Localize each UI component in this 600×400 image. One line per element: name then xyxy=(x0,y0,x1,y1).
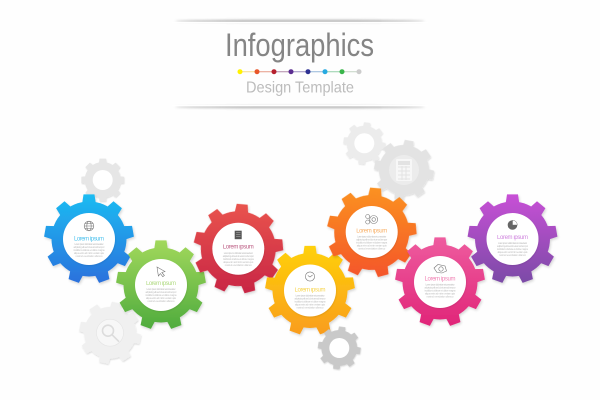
body text: adipiscing elit sed do eiusmod tempor xyxy=(146,291,177,294)
body text: incididunt ut labore et dolore magna xyxy=(356,242,388,244)
icon: clock xyxy=(305,272,315,281)
body text: adipiscing elit sed do eiusmod tempor xyxy=(356,238,387,242)
body text: Lorem ipsum dolor sit amet consectetur xyxy=(74,243,104,246)
body text: Lorem ipsum dolor sit amet consectetur xyxy=(295,294,325,298)
body text: aliqua enim ad minim veniam quis xyxy=(425,292,456,296)
body text: aliqua enim ad minim veniam quis xyxy=(146,297,177,300)
gear: purple xyxy=(468,194,557,283)
body text xyxy=(74,243,105,258)
small grey gear top left xyxy=(81,159,124,201)
body text xyxy=(497,242,529,257)
icon: pie chart xyxy=(508,220,517,230)
body text: aliqua enim ad minim veniam quis xyxy=(74,252,105,255)
body text: adipiscing elit sed do eiusmod tempor xyxy=(497,245,528,248)
heading: Lorem ipsum xyxy=(146,281,176,287)
bottom divider line xyxy=(172,105,428,108)
small grey gear top centre xyxy=(341,120,388,167)
body text: nostrud exercitation ullamco xyxy=(499,254,527,257)
gear: green xyxy=(116,240,206,329)
body text: nostrud exercitation ullamco xyxy=(148,300,175,303)
subtitle: Design Template xyxy=(246,80,354,96)
body text: aliqua enim ad minim veniam quis xyxy=(223,261,254,264)
icon: cogs xyxy=(366,214,378,224)
body text: Lorem ipsum dolor sit amet consectetur xyxy=(425,284,455,286)
grey gear with calculator xyxy=(369,135,439,205)
body text: incididunt ut labore et dolore magna xyxy=(497,248,529,251)
heading: Lorem ipsum xyxy=(223,245,254,251)
gear: blue xyxy=(44,194,134,283)
body text: nostrud exercitation ullamco xyxy=(426,296,454,298)
gear: pink xyxy=(395,237,485,326)
heading: Lorem ipsum xyxy=(356,228,387,234)
body text xyxy=(294,294,326,310)
body text: nostrud exercitation ullamco xyxy=(225,264,252,267)
body text xyxy=(424,284,456,298)
body text: nostrud exercitation ullamco xyxy=(296,306,324,310)
icon: calculator xyxy=(396,159,412,181)
body text: nostrud exercitation ullamco xyxy=(76,255,103,258)
body text: Lorem ipsum dolor sit amet consectetur xyxy=(224,252,253,255)
icon: money hand xyxy=(434,264,446,273)
top divider line xyxy=(172,20,428,23)
icon: magnifier xyxy=(102,325,119,342)
body text: Lorem ipsum dolor sit amet consectetur xyxy=(357,236,386,238)
body text xyxy=(356,236,388,250)
body text: Lorem ipsum dolor sit amet consectetur xyxy=(146,288,176,291)
heading: Lorem ipsum xyxy=(294,288,326,294)
grey gear with magnifier xyxy=(74,296,146,369)
body text xyxy=(146,288,177,303)
body text: incididunt ut labore et dolore magna xyxy=(146,294,177,297)
gear: red xyxy=(190,200,287,296)
body text: aliqua enim ad minim veniam quis xyxy=(357,244,387,248)
gear: orange xyxy=(323,184,420,280)
icon: globe xyxy=(84,221,94,231)
icon: document xyxy=(235,231,242,239)
body text: aliqua enim ad minim veniam quis xyxy=(498,251,528,254)
title: Infographics xyxy=(225,27,374,63)
body text: adipiscing elit sed do eiusmod tempor xyxy=(74,246,105,249)
body text: incididunt ut labore et dolore magna xyxy=(295,300,326,304)
body text: adipiscing elit sed do eiusmod tempor xyxy=(223,255,254,258)
dotted colour timeline xyxy=(238,69,362,74)
gear: yellow xyxy=(265,246,355,334)
body text: nostrud exercitation ullamco xyxy=(358,248,386,250)
body text: incididunt ut labore et dolore magna xyxy=(74,249,105,252)
body text: incididunt ut labore et dolore magna xyxy=(223,258,254,261)
heading: Lorem ipsum xyxy=(497,235,528,241)
icon: cursor xyxy=(157,267,165,277)
body text xyxy=(223,252,254,267)
body text: adipiscing elit sed do eiusmod tempor xyxy=(294,298,326,300)
body text: Lorem ipsum dolor sit amet consectetur xyxy=(498,242,527,245)
body text: adipiscing elit sed do eiusmod tempor xyxy=(424,286,456,290)
heading: Lorem ipsum xyxy=(74,236,104,242)
small grey gear bottom centre xyxy=(315,324,363,372)
body text: aliqua enim ad minim veniam quis xyxy=(295,304,326,306)
heading: Lorem ipsum xyxy=(424,277,456,283)
body text: incididunt ut labore et dolore magna xyxy=(425,290,456,292)
